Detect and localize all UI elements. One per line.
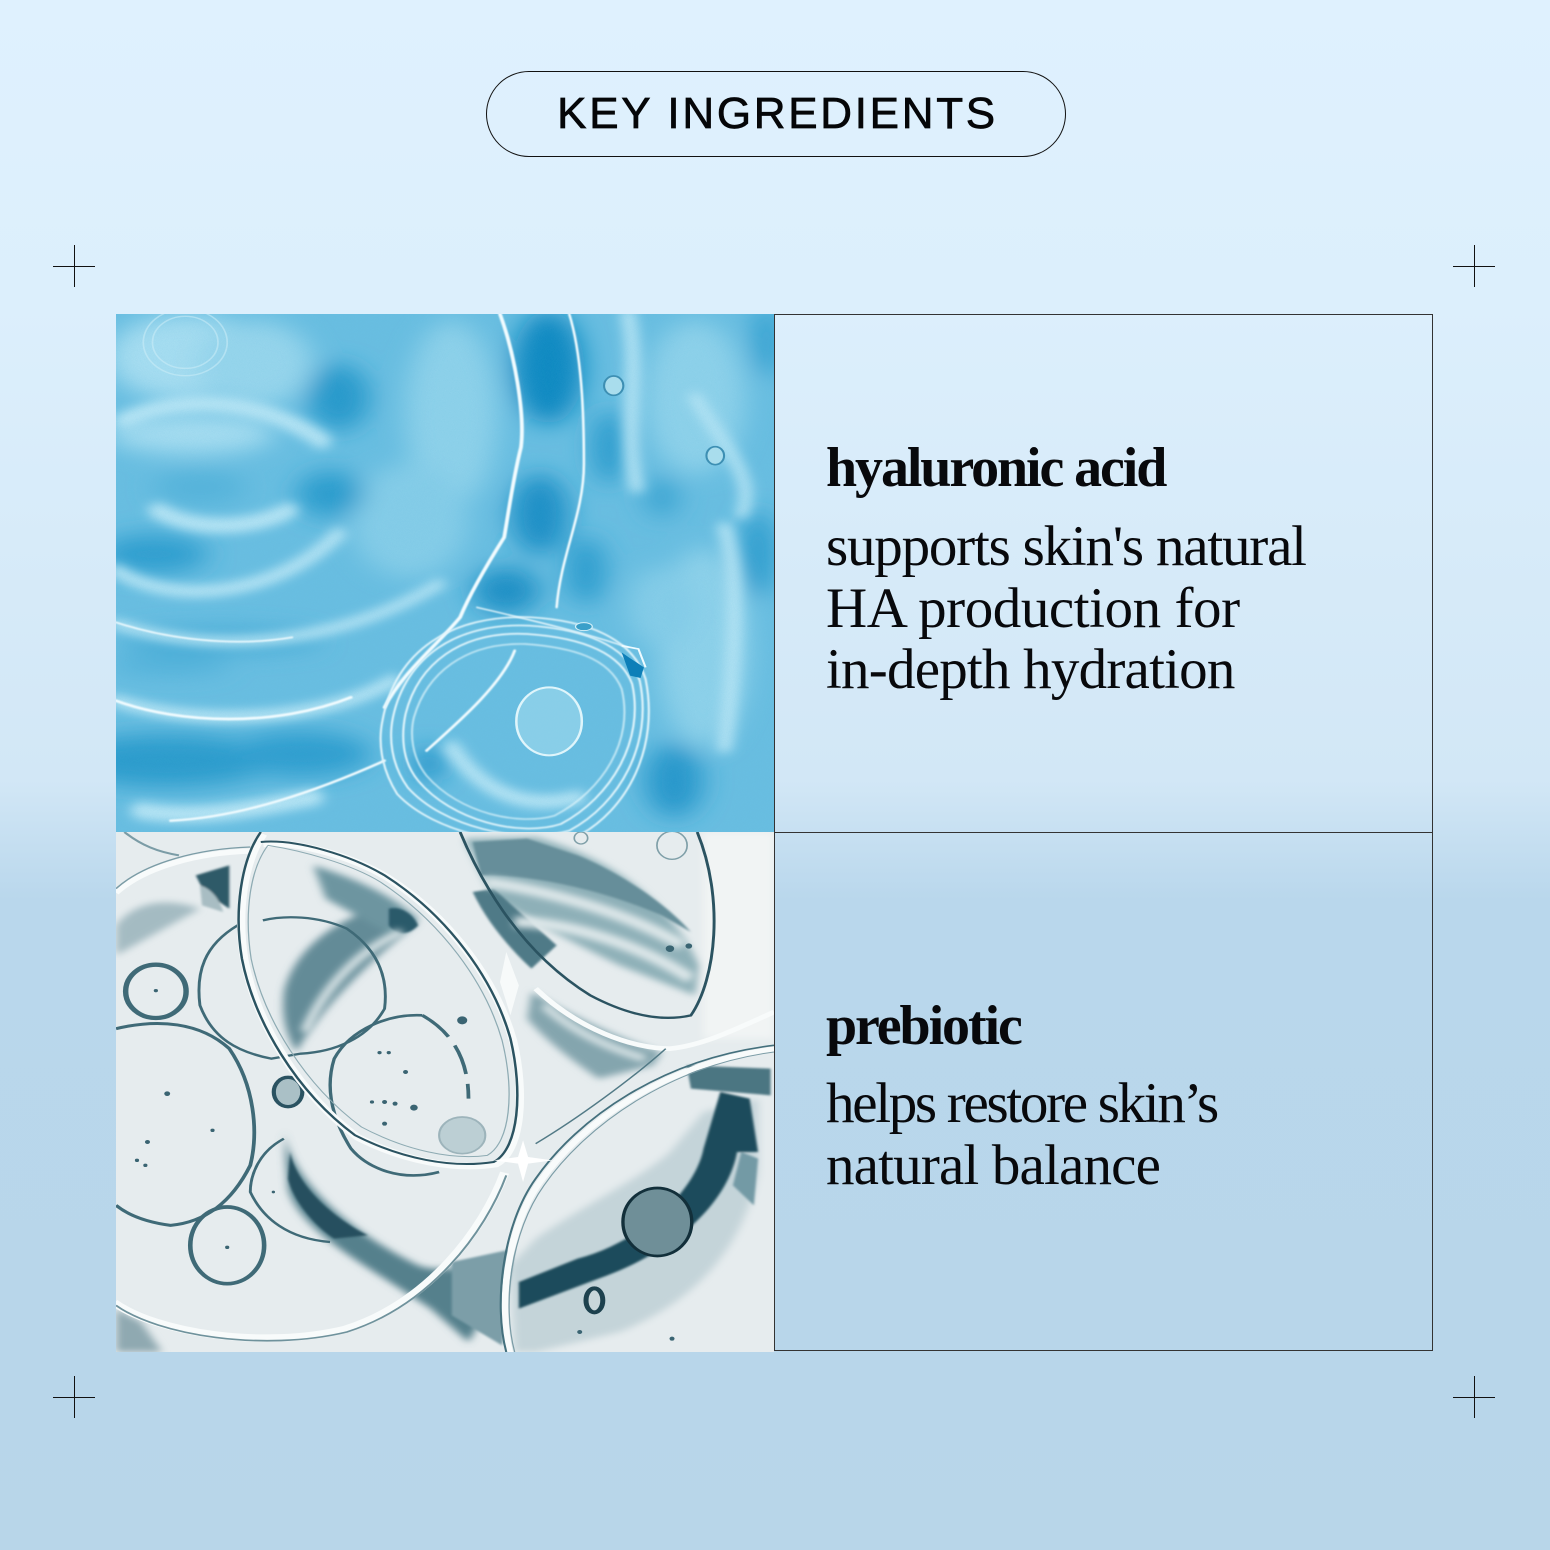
corner mark: bottom left bbox=[53, 1376, 95, 1418]
corner mark: top right bbox=[1453, 245, 1495, 287]
text: hyaluronic acid description: in-depth hydration bbox=[826, 638, 1235, 701]
panel: prebiotic bbox=[774, 832, 1433, 1351]
text: hyaluronic acid description: supports skin's natural bbox=[826, 515, 1306, 578]
text: hyaluronic acid description: HA production for bbox=[826, 576, 1240, 640]
text: prebiotic description: natural balance bbox=[826, 1134, 1160, 1196]
text: hyaluronic acid description bbox=[826, 515, 1306, 701]
title pill bbox=[486, 71, 1066, 157]
heading: hyaluronic acid: hyaluronic acid bbox=[826, 437, 1165, 499]
panel: hyaluronic acid bbox=[774, 314, 1433, 833]
corner mark: bottom right bbox=[1453, 1376, 1495, 1418]
photo: petri dishes with gel bbox=[116, 832, 774, 1352]
text: prebiotic description bbox=[826, 1072, 1218, 1196]
corner mark: top left bbox=[53, 245, 95, 287]
heading: prebiotic: prebiotic bbox=[826, 995, 1021, 1057]
title pill: KEY INGREDIENTS bbox=[557, 89, 998, 138]
photo: water ripples bbox=[116, 314, 774, 832]
text: prebiotic description: helps restore skin’s bbox=[826, 1072, 1217, 1135]
